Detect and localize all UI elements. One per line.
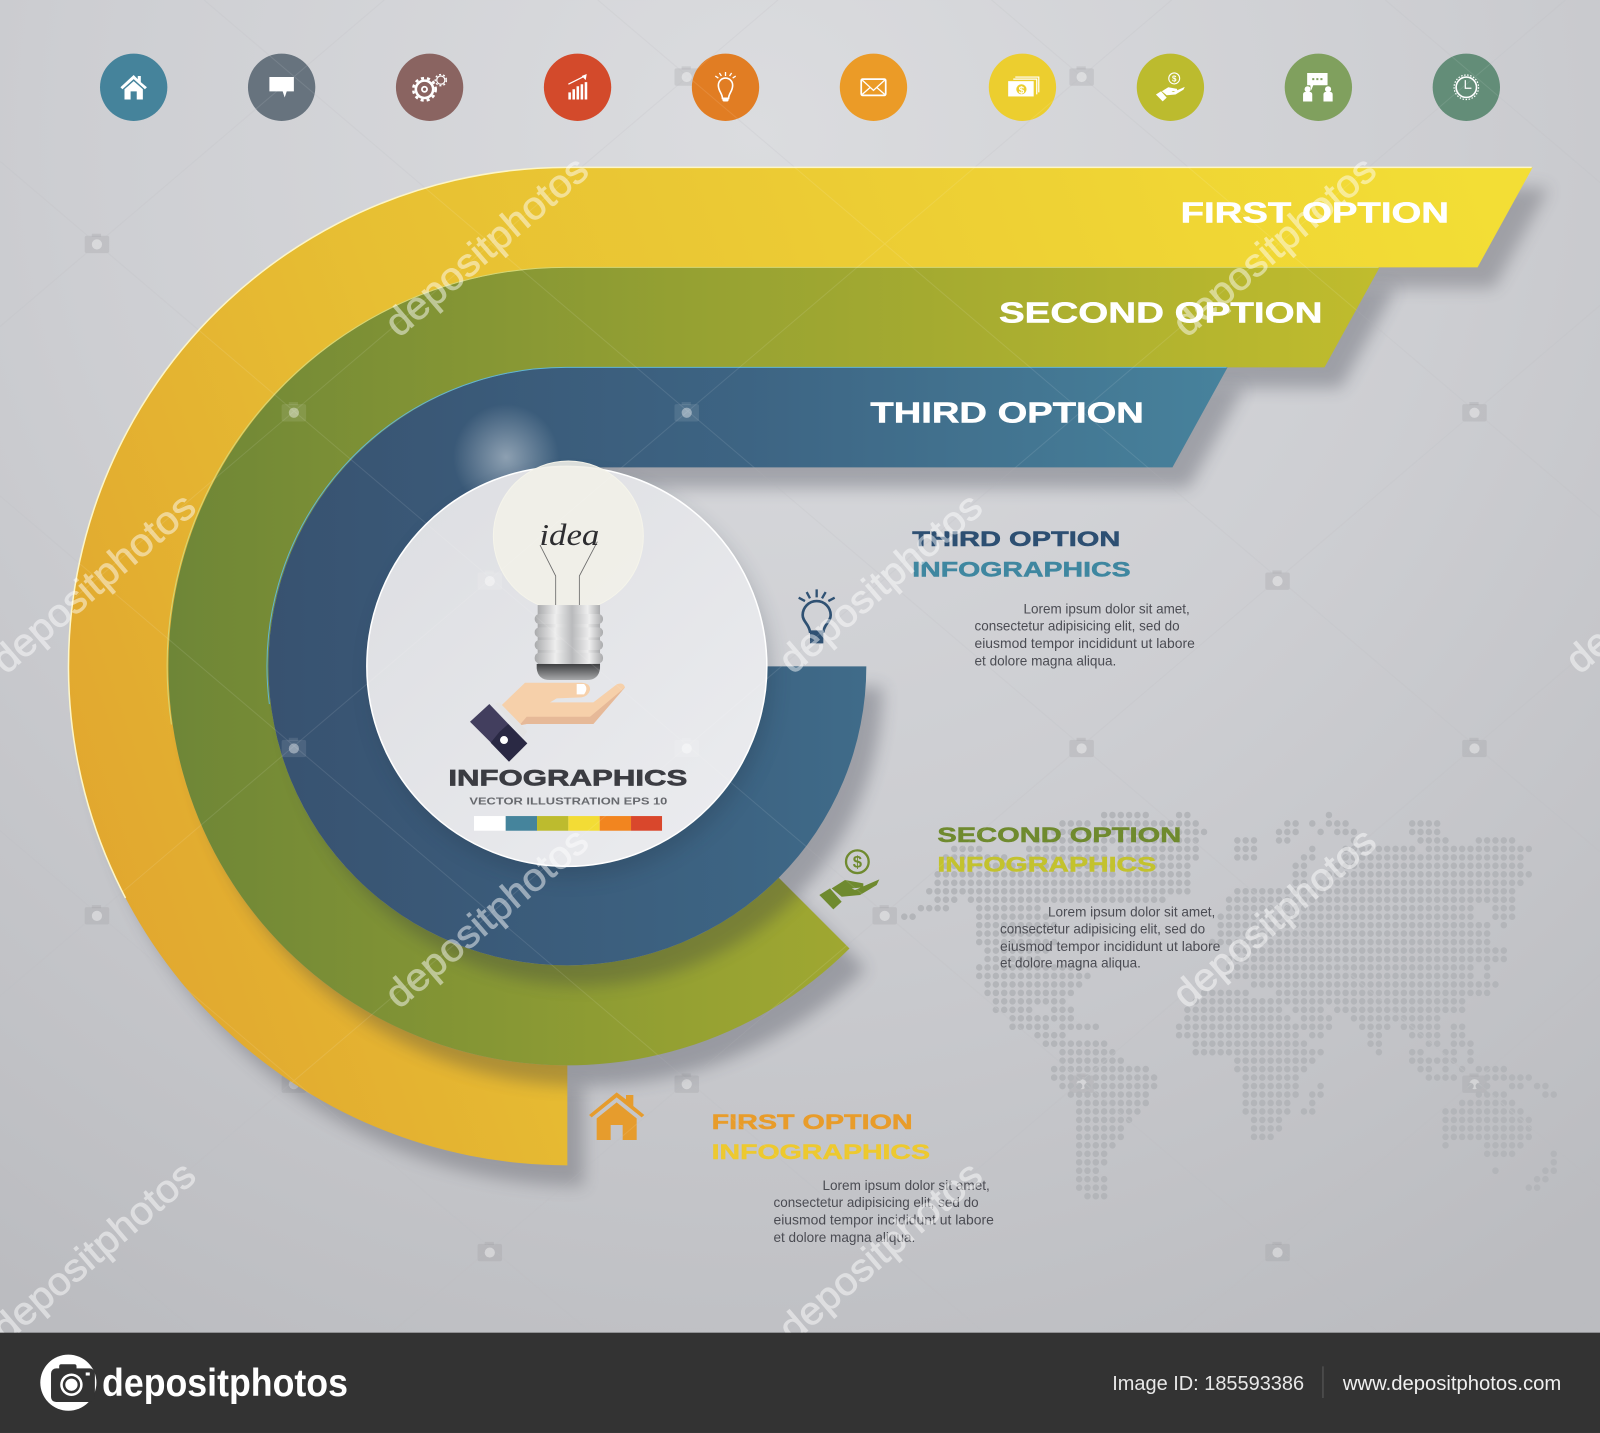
heading: first option infographics: [712, 1110, 930, 1164]
text: second option body: consectetur adipisicing elit, sed do: [1000, 922, 1205, 937]
icon: light bulb: [692, 54, 759, 121]
heading: second option infographics: INFOGRAPHICS: [937, 852, 1156, 876]
band label: first option: FIRST OPTION: [1181, 197, 1449, 229]
footer bar: [0, 1333, 1600, 1433]
watermarks: depositphotos: [1164, 819, 1385, 1017]
text: second option body: [1000, 904, 1221, 970]
heading: first option infographics: INFOGRAPHICS: [712, 1140, 930, 1164]
band label: second option: SECOND OPTION: [999, 297, 1322, 329]
icon: small bulb outline: [799, 589, 835, 643]
icon: orange house: [589, 1092, 644, 1140]
icon: envelope: [840, 54, 907, 121]
bulb screw base: [535, 605, 603, 680]
dotted world map: [904, 815, 1554, 1196]
heading: second option infographics: [937, 823, 1181, 876]
icon: gears: [396, 54, 463, 121]
blue band: third option: [267, 367, 1244, 986]
icon: home: [100, 54, 167, 121]
text: third option body: consectetur adipisicing elit, sed do: [974, 619, 1180, 634]
website: www.depositphotos.com: [1342, 1373, 1561, 1395]
text: third option body: eiusmod tempor incididunt ut labore: [974, 636, 1195, 651]
icon: money: $: [1019, 85, 1025, 96]
text: first option body: Lorem ipsum dolor sit amet,: [822, 1178, 990, 1193]
color strip: [474, 816, 662, 831]
icon: bar chart: [544, 54, 611, 121]
icon: hand with coin: [819, 850, 879, 909]
glow behind bulb: [453, 404, 559, 510]
heading: third option infographics: THIRD OPTION: [912, 527, 1120, 551]
text: third option body: et dolore magna aliqua.: [974, 653, 1116, 668]
illustration: light bulb in hand: [448, 461, 687, 831]
icon: hand with coin: [1137, 54, 1204, 121]
icon: money: [989, 54, 1056, 121]
icon: clock: [1433, 54, 1500, 121]
band shadows and yellow band: first option: [68, 167, 1549, 1186]
text: first option body: consectetur adipisicing elit, sed do: [773, 1195, 979, 1210]
band label: third option: THIRD OPTION: [870, 397, 1144, 429]
heading: third option infographics: [912, 527, 1131, 582]
hand: [470, 683, 625, 762]
word idea: idea: [539, 518, 599, 552]
heading: second option infographics: SECOND OPTION: [937, 823, 1181, 847]
watermarks: depositphotos: [377, 819, 597, 1017]
watermarks: depositphotos: [1164, 148, 1385, 345]
bulb filament: [540, 542, 597, 605]
green band: second option: [167, 267, 1396, 1086]
text: first option body: eiusmod tempor incididunt ut labore: [773, 1213, 994, 1228]
image id: Image ID: 185593386: [1112, 1373, 1304, 1395]
icon row: [100, 54, 1500, 121]
center disc with bulb, hand and title: [367, 461, 771, 878]
icon: people talking: [1285, 54, 1352, 121]
watermarks: depositphotos: [771, 1153, 991, 1350]
heading: first option infographics: FIRST OPTION: [712, 1110, 913, 1134]
text: second option body: et dolore magna aliqua.: [1000, 955, 1141, 970]
icon: speech bubble: [248, 54, 315, 121]
bulb glass: [493, 461, 643, 611]
subtitle: VECTOR ILLUSTRATION EPS 10: [469, 796, 668, 807]
text: first option body: et dolore magna aliqua.: [773, 1230, 915, 1245]
text: third option body: Lorem ipsum dolor sit amet,: [1023, 601, 1190, 616]
text: second option body: Lorem ipsum dolor sit amet,: [1048, 904, 1215, 919]
text: first option body: [773, 1178, 994, 1245]
text: third option body: [974, 601, 1195, 668]
watermarks: depositphotos: [377, 148, 597, 345]
heading: third option infographics: INFOGRAPHICS: [912, 558, 1131, 582]
watermarks: depositphotos: [771, 485, 991, 682]
text: second option body: eiusmod tempor incididunt ut labore: [1000, 939, 1221, 954]
footer logo text: depositphotos: [102, 1362, 348, 1405]
title: INFOGRAPHICS: [448, 766, 687, 791]
footer logo mark: [40, 1355, 96, 1411]
